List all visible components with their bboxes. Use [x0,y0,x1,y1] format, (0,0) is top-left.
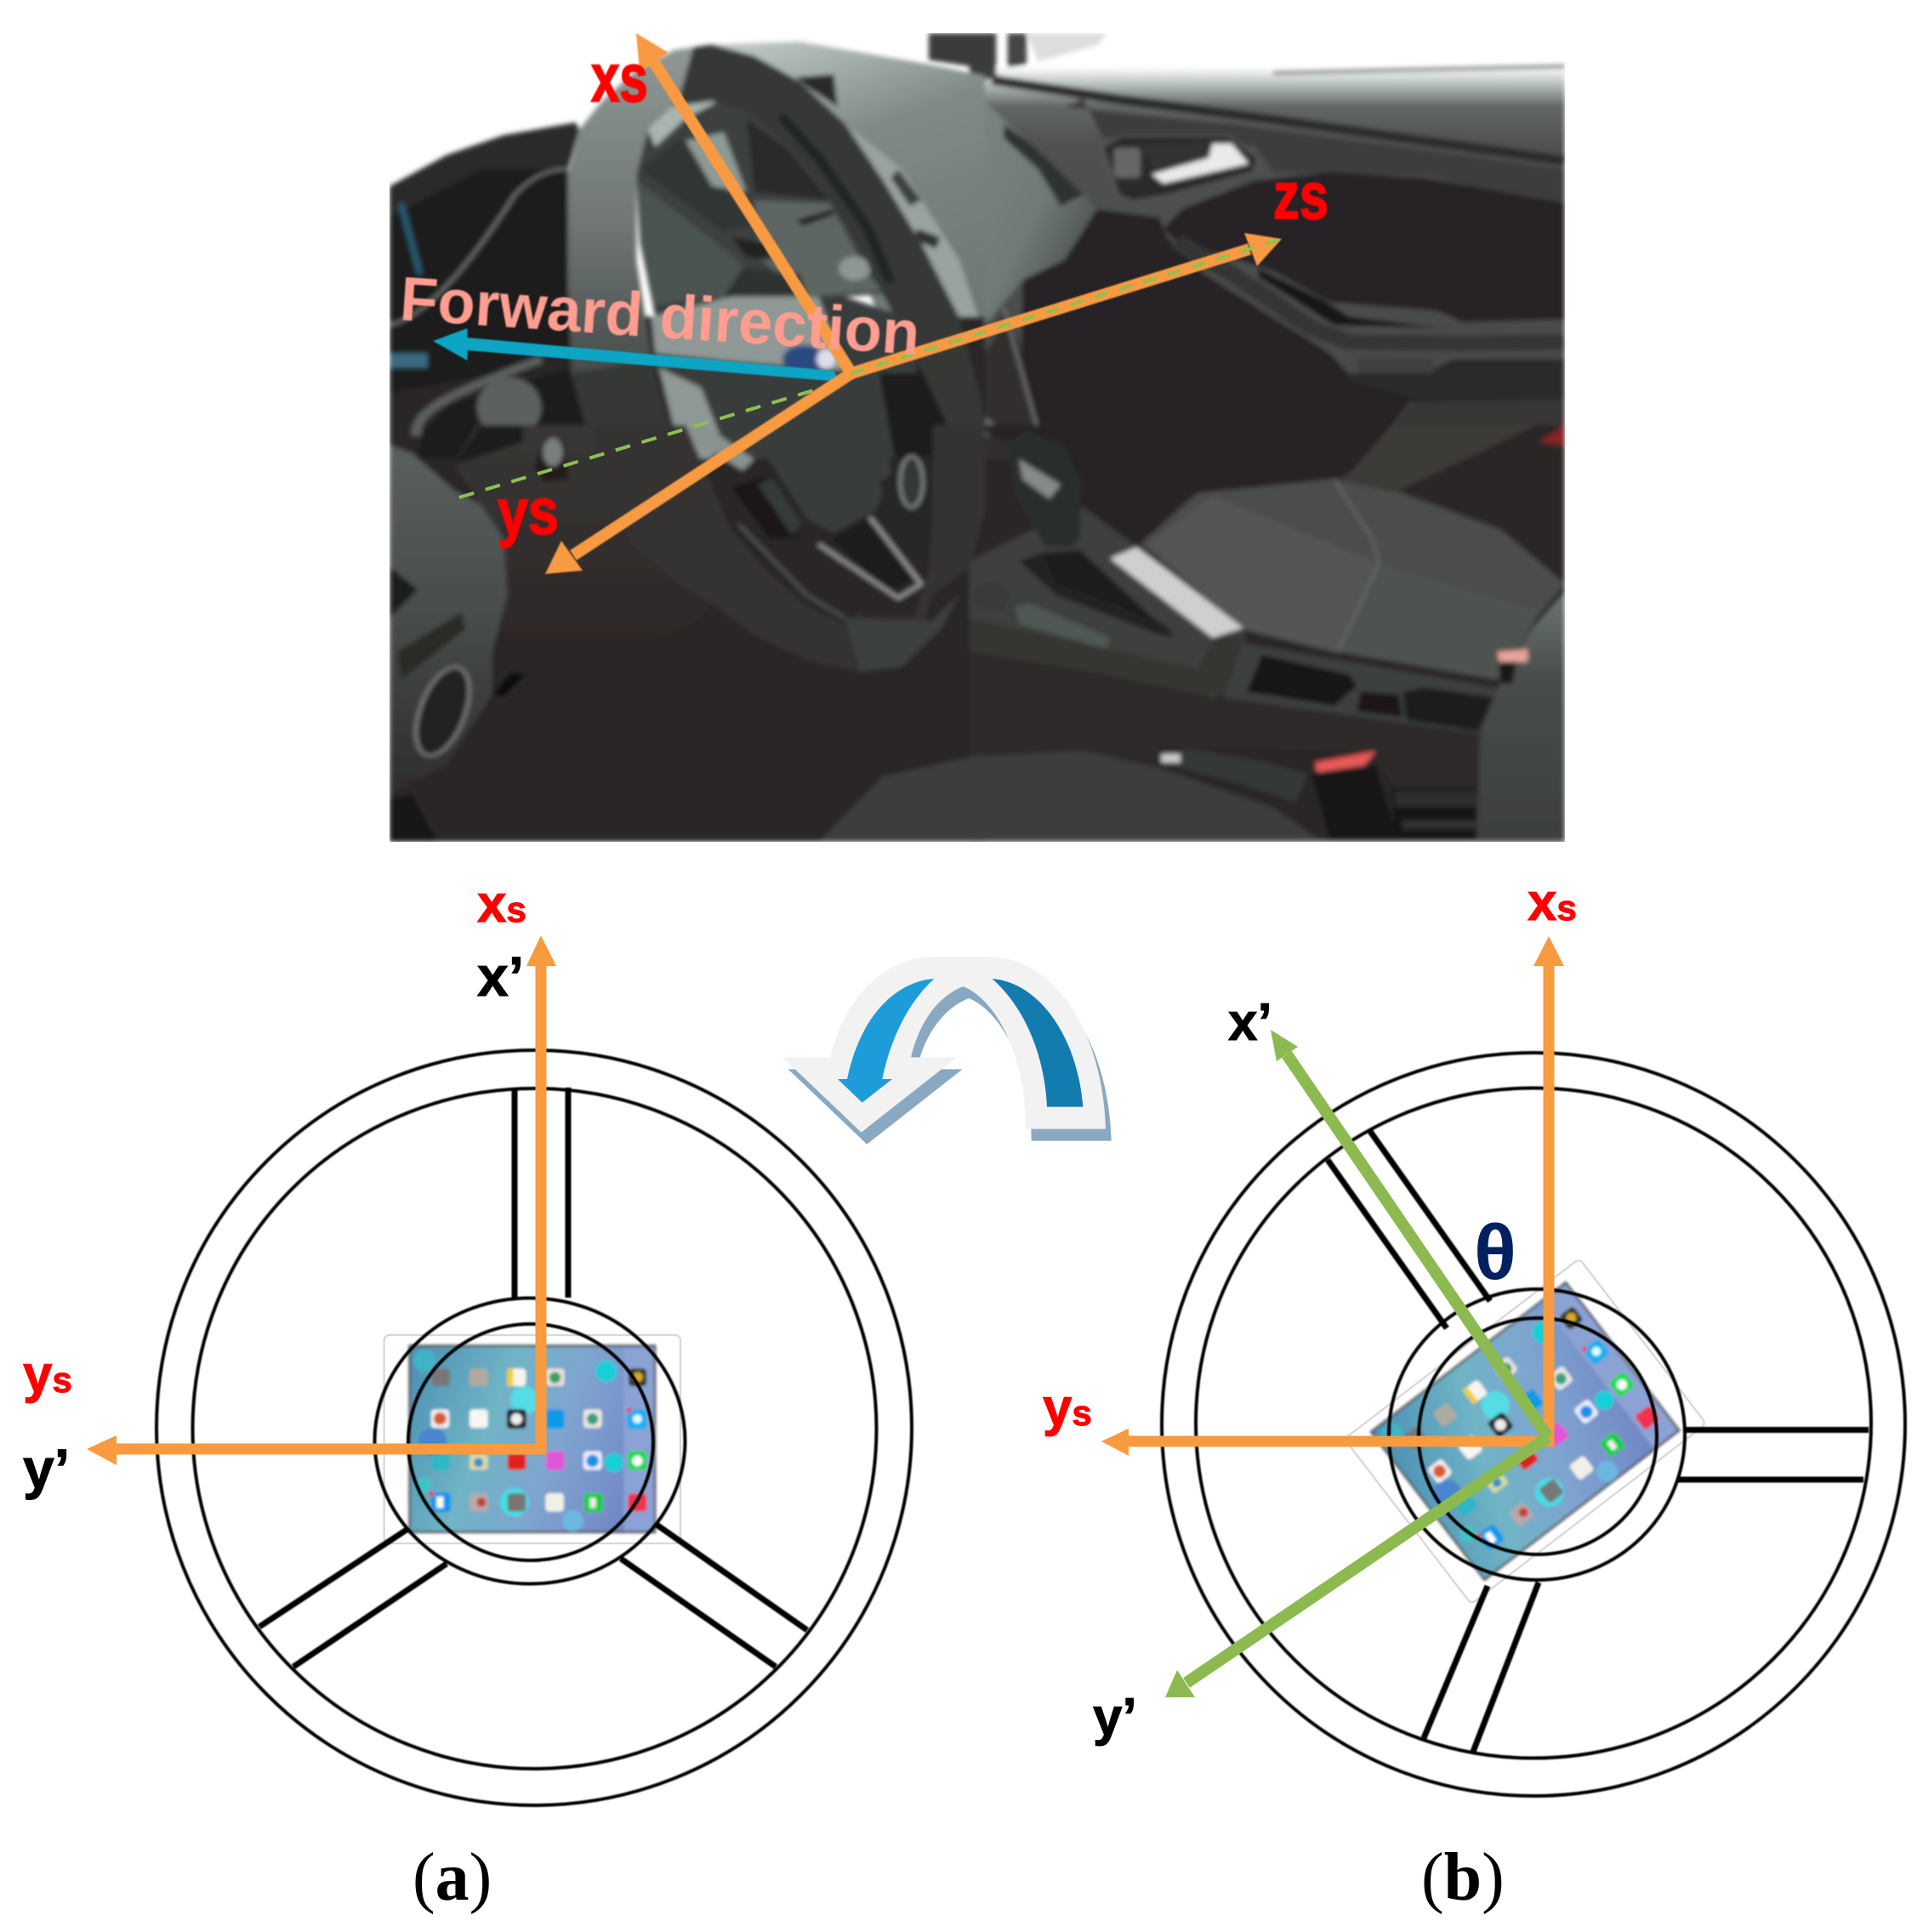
panel: wheel diagram (a) [23,875,912,1805]
photo artwork: dashboard, door, seats and steering wheel [390,33,1565,844]
dashed guide line: zs side [851,239,1282,373]
axis x' (b) [1271,1030,1548,1437]
axis y' (b) [1165,1437,1548,1697]
label: ys: ys [498,475,559,548]
dashed guide line: ys side [459,384,836,497]
axes xs and ys (b) [1101,936,1564,1456]
label: ys (b): ys [1043,1378,1092,1437]
arrow: ys axis [545,373,851,574]
label: y' (a): y’ [23,1437,70,1500]
tablet on hub, rotated (b) [1345,1259,1706,1605]
caption (a): (a) [412,1840,492,1915]
arrow: zs axis [851,233,1282,373]
caption (b): (b) [1421,1840,1505,1915]
label: y' (b): y’ [1093,1688,1137,1747]
label: xs (b): xs [1528,873,1577,932]
axes x' and xs (a) [87,935,556,1465]
label: ys (a): ys [23,1345,72,1404]
label: xs (a): xs [477,875,526,934]
label: theta: θ [1474,1209,1516,1296]
icon: curved rotation arrow [782,957,1112,1145]
label: x' (a): x’ [477,945,524,1008]
panel: wheel diagram (b) [1043,873,1905,1796]
arrow: forward direction [433,328,840,382]
steering wheel outline (b) [1162,1053,1905,1796]
label: forward direction: Forward direction [398,264,922,368]
label: xs: xs [591,40,648,116]
panel: car interior photograph [390,33,1565,844]
tablet on hub (a) [384,1335,680,1543]
label: x' (b): x’ [1228,993,1272,1052]
arrow: xs axis [636,33,851,373]
steering wheel outline (a) [156,1050,912,1805]
label: zs: zs [1273,158,1328,233]
